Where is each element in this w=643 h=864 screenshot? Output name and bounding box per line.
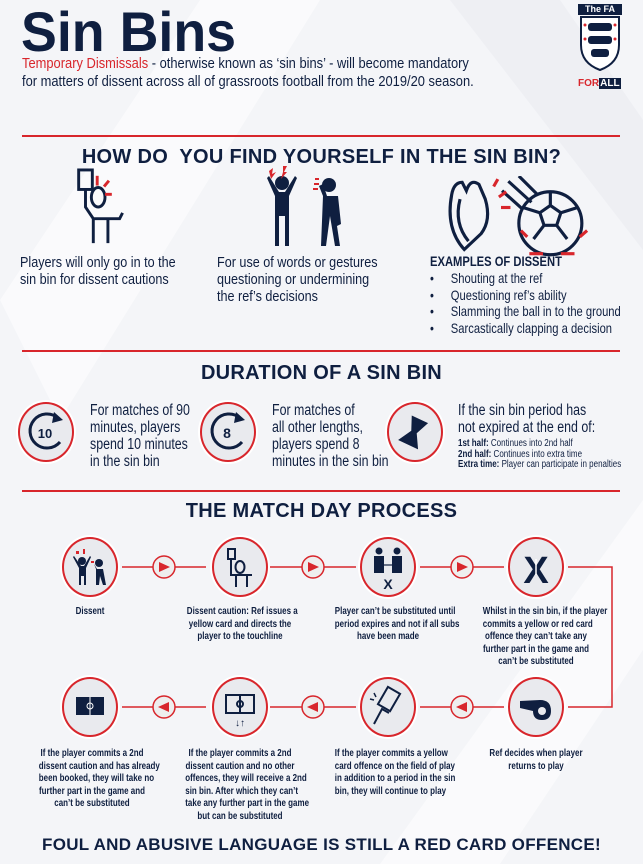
- text: can’t be substituted: [54, 797, 130, 809]
- examples of dissent list: Slamming the ball in to the ground: [451, 303, 621, 319]
- step 3: no substitution: X: [383, 576, 393, 592]
- examples of dissent list: Questioning ref’s ability: [451, 287, 567, 303]
- logo: The FA: [585, 4, 615, 14]
- duration: end of period: If the sin bin period has: [458, 402, 586, 419]
- step 2: dissent caution: yellow card and directs the: [189, 618, 291, 630]
- duration: 10 minutes: For matches of 90: [90, 402, 190, 419]
- step 6: yellow on field: If the player commits a yellow: [335, 747, 448, 759]
- duration: 8 minutes: [198, 400, 388, 470]
- step 4: yellow or red in sin bin: Whilst in the sin bin, if the player: [483, 605, 607, 617]
- step 4: yellow or red in sin bin: commits a yellow or red card: [483, 618, 593, 630]
- step 1: dissent: [60, 535, 120, 617]
- step 3: no substitution: [335, 535, 460, 642]
- step 4: yellow or red in sin bin: can’t be substituted: [498, 655, 574, 667]
- step 1: dissent: Dissent: [76, 605, 104, 617]
- duration: 8 minutes: 8: [223, 425, 231, 441]
- text: have been made: [357, 630, 419, 642]
- duration: 10 minutes: 10: [38, 426, 52, 441]
- icon: referee card: [77, 168, 124, 244]
- duration: 8 minutes: minutes in the sin bin: [272, 453, 388, 470]
- step 7: 2nd sin bin: dissent caution and no other: [185, 760, 295, 772]
- step 6: yellow on field: [335, 675, 455, 796]
- step 7: 2nd sin bin: take any further part in the game: [185, 797, 309, 809]
- step 8: already booked: dissent caution and has already: [39, 760, 160, 772]
- text: but can be substituted: [197, 810, 283, 822]
- duration: 10 minutes: spend 10 minutes: [90, 436, 188, 453]
- step 8: already booked: If the player commits a 2nd: [41, 747, 143, 759]
- step 7: 2nd sin bin: [185, 675, 309, 822]
- duration: 10 minutes: [16, 400, 190, 470]
- subtitle: for matters of dissent across all of grassroots football from the 2019/20 season.: [22, 72, 474, 90]
- duration: 10 minutes: in the sin bin: [90, 453, 160, 470]
- text: dissent cautions: sin bin for dissent cautions: [20, 272, 169, 288]
- title: Sin Bins: [21, 0, 236, 63]
- step 3: no substitution: Player can’t be substituted until: [335, 605, 455, 617]
- icon: two players: [267, 166, 341, 246]
- flow connectors: [122, 555, 613, 719]
- step 2: dissent caution: [187, 535, 298, 642]
- duration: end of period: not expired at the end of:: [458, 419, 595, 436]
- step 7: 2nd sin bin: ↓↑: [235, 718, 245, 729]
- duration: 8 minutes: For matches of: [272, 402, 355, 419]
- step 7: 2nd sin bin: offences, they will receive a 2nd: [185, 772, 307, 784]
- step 8: already booked: [39, 675, 160, 809]
- heading: how do you find yourself: HOW DO YOU FIND YOURSELF IN THE SIN BIN?: [82, 146, 561, 168]
- duration: 10 minutes: minutes, players: [90, 419, 180, 436]
- text: dissent cautions: [20, 255, 176, 288]
- step 6: yellow on field: card offence on the field of play: [335, 760, 455, 772]
- logo: [578, 4, 622, 89]
- step 4: yellow or red in sin bin: [482, 535, 608, 667]
- step 6: yellow on field: bin, they will continue to play: [335, 784, 446, 796]
- step 5: ref decides: returns to play: [508, 760, 564, 772]
- examples of dissent list: [430, 253, 621, 336]
- step 8: already booked: further part in the game and: [39, 784, 145, 796]
- icon: clapping and ball: [448, 176, 588, 256]
- heading: duration: DURATION OF A SIN BIN: [201, 362, 442, 384]
- subtitle: Temporary Dismissals - otherwise known as ‘sin bins’ - will become mandatory: [22, 55, 469, 72]
- step 4: yellow or red in sin bin: offence they can’t take any: [485, 630, 587, 642]
- step 4: yellow or red in sin bin: X: [523, 550, 549, 592]
- step 3: no substitution: period expires and not if all subs: [335, 618, 459, 630]
- examples of dissent list: Sarcastically clapping a decision: [451, 320, 612, 336]
- duration: end of period: 1st half: Continues into 2nd half: [458, 438, 573, 449]
- text: dissent cautions: Players will only go in to the: [20, 255, 176, 271]
- duration: end of period: 2nd half: Continues into extra time: [458, 448, 582, 460]
- step 2: dissent caution: Dissent caution: Ref issues a: [187, 605, 298, 617]
- subtitle: [22, 55, 474, 90]
- text: words or gestures: questioning or undermining: [217, 272, 369, 288]
- step 6: yellow on field: in addition to a period in the sin: [335, 772, 455, 784]
- text: words or gestures: [217, 255, 378, 305]
- step 4: yellow or red in sin bin: further part in the game and: [483, 642, 589, 654]
- logo: FORALL: [578, 78, 620, 89]
- text: words or gestures: the ref’s decisions: [217, 289, 318, 305]
- examples of dissent list: Shouting at the ref: [451, 270, 542, 286]
- duration: 8 minutes: all other lengths,: [272, 419, 363, 436]
- heading: match day process: THE MATCH DAY PROCESS: [186, 500, 457, 522]
- step 7: 2nd sin bin: If the player commits a 2nd: [189, 747, 291, 759]
- duration: 8 minutes: players spend 8: [272, 436, 360, 453]
- duration: end of period: [385, 400, 621, 470]
- step 8: already booked: been booked, they will take no: [39, 772, 154, 784]
- duration: end of period: Extra time: Player can participate in penalties: [458, 459, 621, 470]
- step 7: 2nd sin bin: sin bin. After which they can’t: [185, 784, 298, 796]
- text: player to the touchline: [197, 630, 283, 642]
- step 5: ref decides: Ref decides when player: [489, 747, 583, 759]
- examples of dissent list: EXAMPLES OF DISSENT: [430, 253, 562, 269]
- step 5: ref decides: [489, 677, 583, 772]
- footer warning: FOUL AND ABUSIVE LANGUAGE IS STILL A RED CARD OFFENCE!: [42, 835, 601, 854]
- text: words or gestures: For use of words or gestures: [217, 255, 378, 271]
